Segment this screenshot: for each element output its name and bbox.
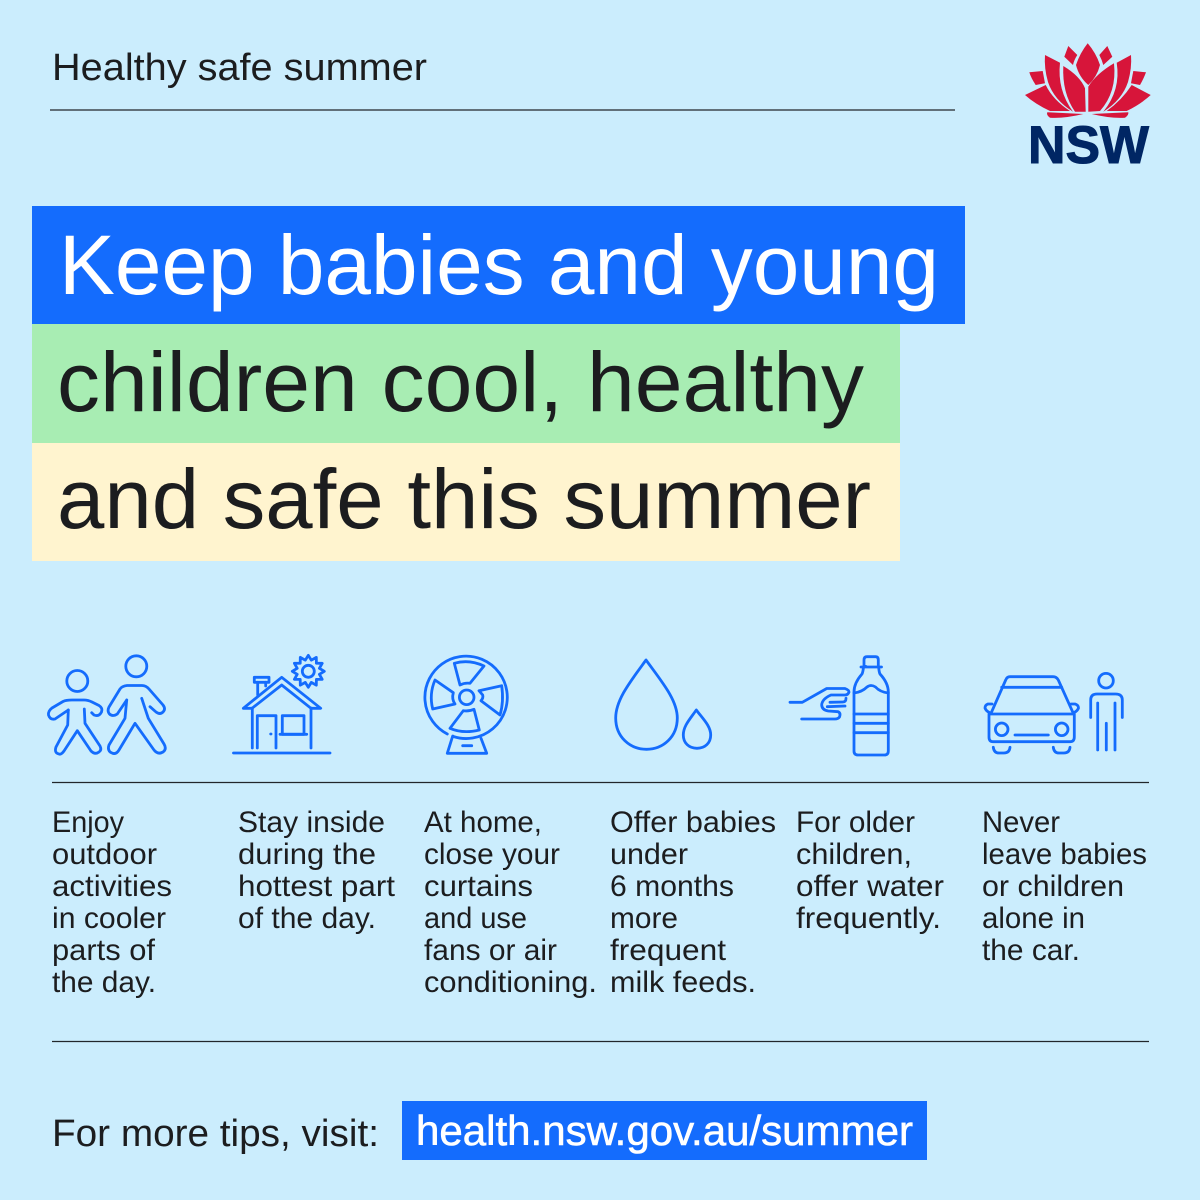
tip 1 text: the day.: [52, 966, 156, 999]
footer prompt: For more tips, visit:: [52, 1113, 379, 1155]
tip 5 text: frequently.: [796, 902, 941, 935]
tip 6 text: [982, 806, 1147, 967]
tip 5 text: [796, 806, 944, 935]
icon: fan: [425, 656, 507, 753]
tip 6 text: Never: [982, 806, 1060, 839]
title line 2: children cool, healthy: [57, 335, 864, 429]
tip 4 text: [610, 806, 776, 999]
title line 3: and safe this summer: [57, 452, 871, 546]
tip 3 text: and use: [424, 902, 527, 935]
tip 4 text: frequent: [610, 934, 727, 967]
icon: hand and water bottle: [790, 657, 888, 755]
tip 4 text: milk feeds.: [610, 966, 756, 999]
tip 1 text: parts of: [52, 934, 156, 967]
tip 2 text: of the day.: [238, 902, 376, 935]
tip 6 text: or children: [982, 870, 1124, 903]
tip 2 text: [238, 806, 396, 935]
tip 3 text: [424, 806, 597, 999]
tip 3 text: close your: [424, 838, 560, 871]
tip 6 text: alone in: [982, 902, 1085, 935]
tip 5 text: children,: [796, 838, 912, 871]
tip 2 text: hottest part: [238, 870, 396, 903]
tip 4 text: more: [610, 902, 678, 935]
tip 5 text: offer water: [796, 870, 944, 903]
tip 4 text: under: [610, 838, 688, 871]
tip 3 text: conditioning.: [424, 966, 597, 999]
tip 1 text: outdoor: [52, 838, 157, 871]
icon: water drops: [616, 660, 711, 749]
tip 4 text: Offer babies: [610, 806, 776, 839]
NSW logo: [1025, 43, 1151, 175]
footer link: health.nsw.gov.au/summer: [416, 1107, 913, 1154]
tip 3 text: At home,: [424, 806, 542, 839]
NSW logo: NSW: [1028, 116, 1149, 175]
icon: children walking: [48, 656, 165, 754]
tip 1 text: activities: [52, 870, 172, 903]
header label: Healthy safe summer: [52, 47, 427, 89]
title line 1: Keep babies and young: [59, 218, 939, 312]
tip 4 text: 6 months: [610, 870, 734, 903]
tip 1 text: [52, 806, 172, 999]
tip 1 text: Enjoy: [52, 806, 124, 839]
tip 6 text: the car.: [982, 934, 1080, 967]
tip 2 text: Stay inside: [238, 806, 385, 839]
tip 1 text: in cooler: [52, 902, 166, 935]
tip 3 text: curtains: [424, 870, 533, 903]
icon: car and person: [985, 673, 1122, 753]
tip 6 text: leave babies: [982, 838, 1147, 871]
tip 5 text: For older: [796, 806, 915, 839]
tip 3 text: fans or air: [424, 934, 557, 967]
icon: house and sun: [234, 655, 330, 753]
tip 2 text: during the: [238, 838, 376, 871]
